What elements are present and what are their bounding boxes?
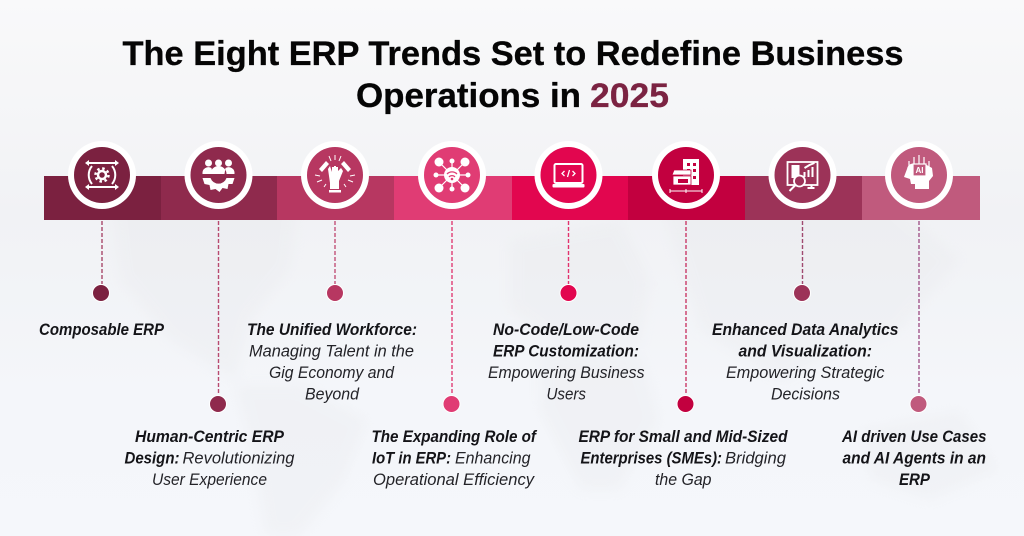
label: AI driven Use Cases: ERP: [899, 471, 931, 489]
label: Human-Centric ERP Design: Human-Centric ERP: [135, 428, 285, 446]
icon: data analytics monitor: [768, 141, 836, 209]
label: Enhanced Data Analytics and Visualization: Decisions: [771, 386, 840, 404]
label: ERP for Small and Mid-Sized Enterprises: [578, 428, 788, 489]
label: Composable ERP: Composable ERP: [39, 321, 165, 339]
icon: IoT network: [418, 141, 486, 209]
label: The Unified Workforce: [247, 321, 417, 404]
label: Human-Centric ERP Design: Design:: [124, 450, 180, 468]
icon: AI head: AI: [916, 166, 924, 175]
label: No-Code/Low-Code ERP Customization: Users: [546, 386, 586, 404]
label: Human-Centric ERP Design: [124, 428, 295, 489]
connector 4: [443, 221, 460, 412]
label: Human-Centric ERP Design: User Experience: [152, 471, 267, 489]
icon: laptop code: [534, 141, 602, 209]
label: The Expanding Role of IoT in ERP: The Expanding Role of: [372, 428, 537, 446]
label: The Unified Workforce: Gig Economy and: [269, 364, 395, 382]
connector 2: [210, 221, 226, 412]
icon: people and gear: [184, 141, 252, 209]
title: The Eight ERP Trends Set to Redefine Business: [122, 35, 904, 73]
label: ERP for Small and Mid-Sized Enterprises: the Gap: [655, 471, 712, 489]
title: [122, 35, 904, 115]
icon: AI head: [885, 141, 953, 209]
label: The Unified Workforce: Beyond: [305, 386, 360, 404]
icon: shop and office: [652, 141, 720, 209]
label: The Expanding Role of IoT in ERP: IoT in ERP:: [372, 450, 451, 468]
connector 7: [794, 221, 810, 302]
label: AI driven Use Cases: AI driven Use Cases: [841, 428, 986, 446]
connector 6: [677, 221, 694, 412]
icon: hands together: [301, 141, 369, 209]
label: No-Code/Low-Code ERP Customization: Empowering Business: [488, 364, 644, 382]
icon: composable gear: [68, 141, 136, 209]
label: ERP for Small and Mid-Sized Enterprises: Enterprises (SMEs):: [580, 450, 722, 468]
label: Enhanced Data Analytics and Visualization: and Visualization:: [738, 342, 872, 360]
title: Operations in: [356, 77, 581, 115]
label: The Unified Workforce: Managing Talent in the: [249, 342, 414, 360]
label: Enhanced Data Analytics and Visualization: Enhanced Data Analytics: [712, 321, 898, 339]
label: AI driven Use Cases: [841, 428, 986, 489]
label: No-Code/Low-Code ERP Customization: ERP Customization:: [493, 342, 639, 360]
label: The Unified Workforce: The Unified Workforce:: [247, 321, 417, 339]
label: Enhanced Data Analytics and Visualization: [712, 321, 898, 404]
label: The Expanding Role of IoT in ERP: Enhancing: [455, 450, 531, 468]
label: Enhanced Data Analytics and Visualization: Empowering Strategic: [726, 364, 885, 382]
label: No-Code/Low-Code ERP Customization: No-Code/Low-Code: [493, 321, 639, 339]
label: The Expanding Role of IoT in ERP: [372, 428, 537, 489]
timeline bar: [44, 176, 980, 220]
title: 2025: [590, 77, 669, 115]
connector 5: [560, 221, 577, 302]
label: Human-Centric ERP Design: Revolutionizing: [182, 450, 295, 468]
label: AI driven Use Cases: and AI Agents in an: [842, 450, 986, 468]
label: ERP for Small and Mid-Sized Enterprises: Bridging: [725, 450, 787, 468]
label: No-Code/Low-Code ERP Customization: [488, 321, 644, 404]
label: The Expanding Role of IoT in ERP: Operational Efficiency: [373, 471, 536, 489]
label: ERP for Small and Mid-Sized Enterprises: ERP for Small and Mid-Sized: [578, 428, 788, 446]
connector 8: [910, 221, 927, 412]
connector 3: [326, 221, 344, 302]
connector 1: [92, 221, 110, 302]
